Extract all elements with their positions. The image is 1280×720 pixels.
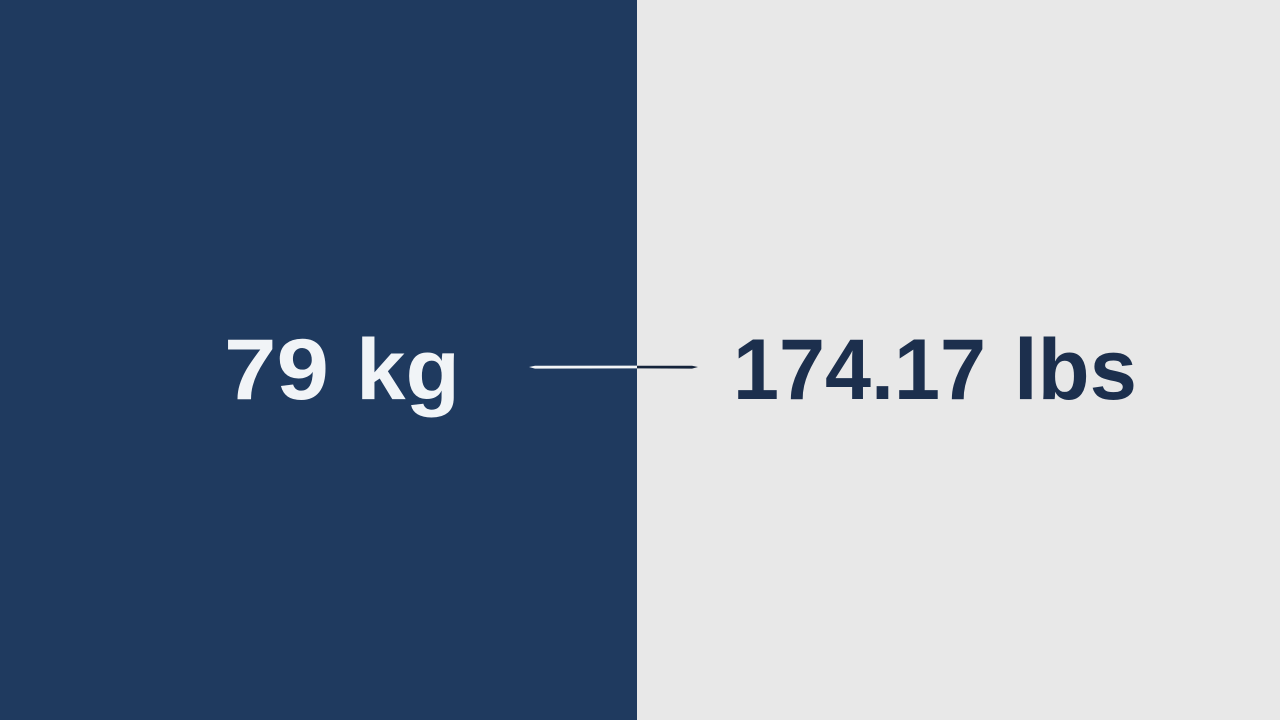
panel: left navy <box>0 0 637 720</box>
text: kilograms value: 79 <box>224 322 329 418</box>
text: pounds value: 174.17 <box>733 322 986 418</box>
panel: right light grey <box>637 0 1280 720</box>
text: kilograms value: kg <box>356 322 460 418</box>
text: pounds value: lbs <box>1014 322 1137 418</box>
connector line <box>529 366 698 369</box>
